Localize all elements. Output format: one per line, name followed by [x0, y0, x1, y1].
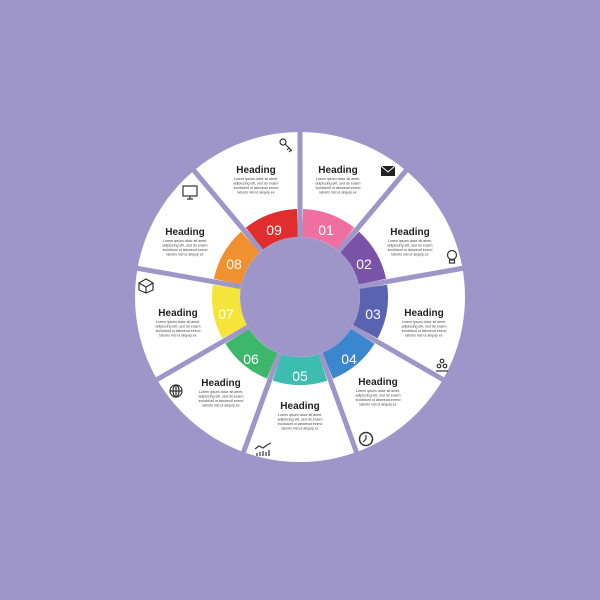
icon: globe — [170, 385, 182, 397]
text block 07: Heading — [158, 308, 198, 319]
text block 09: laboris nisi ut aliquip ex — [237, 190, 275, 194]
segment 02 — [195, 192, 405, 402]
text block 08: laboris nisi ut aliquip ex — [166, 252, 204, 256]
text block 02: adipiscing elit, sed do eiusm — [388, 244, 432, 248]
text block 04: laboris nisi ut aliquip ex — [359, 402, 397, 406]
text block 02 — [388, 227, 433, 256]
text block 02: incididunt ut laboreud exerci — [388, 248, 433, 252]
text block 02: laboris nisi ut aliquip ex — [391, 252, 429, 256]
text block 09: Lorem ipsum dolor sit amet, — [234, 177, 278, 181]
segment 05 — [207, 204, 393, 390]
text block 04: adipiscing elit, sed do eiusm — [356, 394, 400, 398]
text block 01 — [316, 165, 361, 194]
text block 01: laboris nisi ut aliquip ex — [319, 190, 357, 194]
text block 03: Heading — [404, 308, 444, 319]
text block 05: laboris nisi ut aliquip ex — [281, 426, 319, 430]
segment 09 — [196, 193, 404, 401]
icon: key — [280, 139, 292, 152]
segment 07 — [200, 197, 400, 397]
icon: bulb — [448, 250, 456, 263]
text block 03: laboris nisi ut aliquip ex — [405, 334, 443, 338]
text block 02: Lorem ipsum dolor sit amet, — [388, 239, 432, 243]
segment 05: 05 — [292, 368, 308, 384]
text block 04 — [356, 377, 401, 406]
text block 02: Heading — [390, 227, 430, 238]
text block 07: adipiscing elit, sed do eiusm — [156, 324, 200, 328]
text block 04: Lorem ipsum dolor sit amet, — [356, 389, 400, 393]
text block 08 — [163, 227, 208, 256]
icon: people — [436, 359, 448, 371]
segment 08: 08 — [226, 256, 242, 272]
text block 06: Lorem ipsum dolor sit amet, — [199, 390, 243, 394]
segment 06 — [204, 201, 396, 393]
segment 01: 01 — [318, 222, 334, 238]
segment 08 — [212, 209, 388, 385]
text block 06: incididunt ut laboreud exerci — [199, 399, 244, 403]
text block 03: Lorem ipsum dolor sit amet, — [402, 320, 446, 324]
icon: clock — [360, 432, 372, 446]
text block 06: Heading — [201, 378, 241, 389]
segment 01 — [223, 220, 377, 374]
text block 01: adipiscing elit, sed do eiusm — [316, 182, 360, 186]
text block 05: adipiscing elit, sed do eiusm — [278, 418, 322, 422]
text block 09: incididunt ut laboreud exerci — [234, 186, 279, 190]
text block 01: Lorem ipsum dolor sit amet, — [316, 177, 360, 181]
icon: box — [139, 279, 153, 293]
segment 07: 07 — [218, 306, 234, 322]
text block 01: Heading — [318, 165, 358, 176]
text block 08: incididunt ut laboreud exerci — [163, 248, 208, 252]
text block 05 — [278, 401, 323, 430]
text block 06: laboris nisi ut aliquip ex — [202, 404, 240, 408]
segment 03: 03 — [365, 306, 381, 322]
segment 02: 02 — [356, 256, 372, 272]
text block 04: incididunt ut laboreud exerci — [356, 398, 401, 402]
text block 07 — [156, 308, 201, 338]
text block 05: incididunt ut laboreud exerci — [278, 422, 323, 426]
segment 09: 09 — [266, 222, 282, 238]
icon: monitor — [183, 186, 197, 199]
segment 04 — [198, 195, 402, 399]
text block 07: incididunt ut laboreud exerci — [156, 329, 201, 333]
icon: chart — [255, 443, 271, 456]
text block 03: incididunt ut laboreud exerci — [402, 329, 447, 333]
text block 01: incididunt ut laboreud exerci — [316, 186, 361, 190]
segment 06: 06 — [243, 351, 259, 367]
text block 03: adipiscing elit, sed do eiusm — [402, 324, 446, 328]
text block 09: adipiscing elit, sed do eiusm — [234, 182, 278, 186]
text block 08: Lorem ipsum dolor sit amet, — [163, 239, 207, 243]
icon: mail — [381, 166, 395, 176]
text block 04: Heading — [358, 377, 398, 388]
segment 03 — [216, 213, 384, 381]
text block 08: Heading — [165, 227, 205, 238]
segment 04: 04 — [341, 351, 357, 367]
center hole — [240, 237, 360, 357]
text block 07: Lorem ipsum dolor sit amet, — [156, 320, 200, 324]
text block 06 — [199, 378, 244, 408]
text block 09 — [234, 165, 279, 194]
text block 03 — [402, 308, 447, 338]
ring: colored numbered segments — [195, 192, 405, 402]
text block 07: laboris nisi ut aliquip ex — [159, 334, 197, 338]
text block 09: Heading — [236, 165, 276, 176]
text block 08: adipiscing elit, sed do eiusm — [163, 244, 207, 248]
text block 06: adipiscing elit, sed do eiusm — [199, 394, 243, 398]
text block 05: Lorem ipsum dolor sit amet, — [278, 413, 322, 417]
text block 05: Heading — [280, 401, 320, 412]
disc: white wheel — [135, 132, 465, 462]
